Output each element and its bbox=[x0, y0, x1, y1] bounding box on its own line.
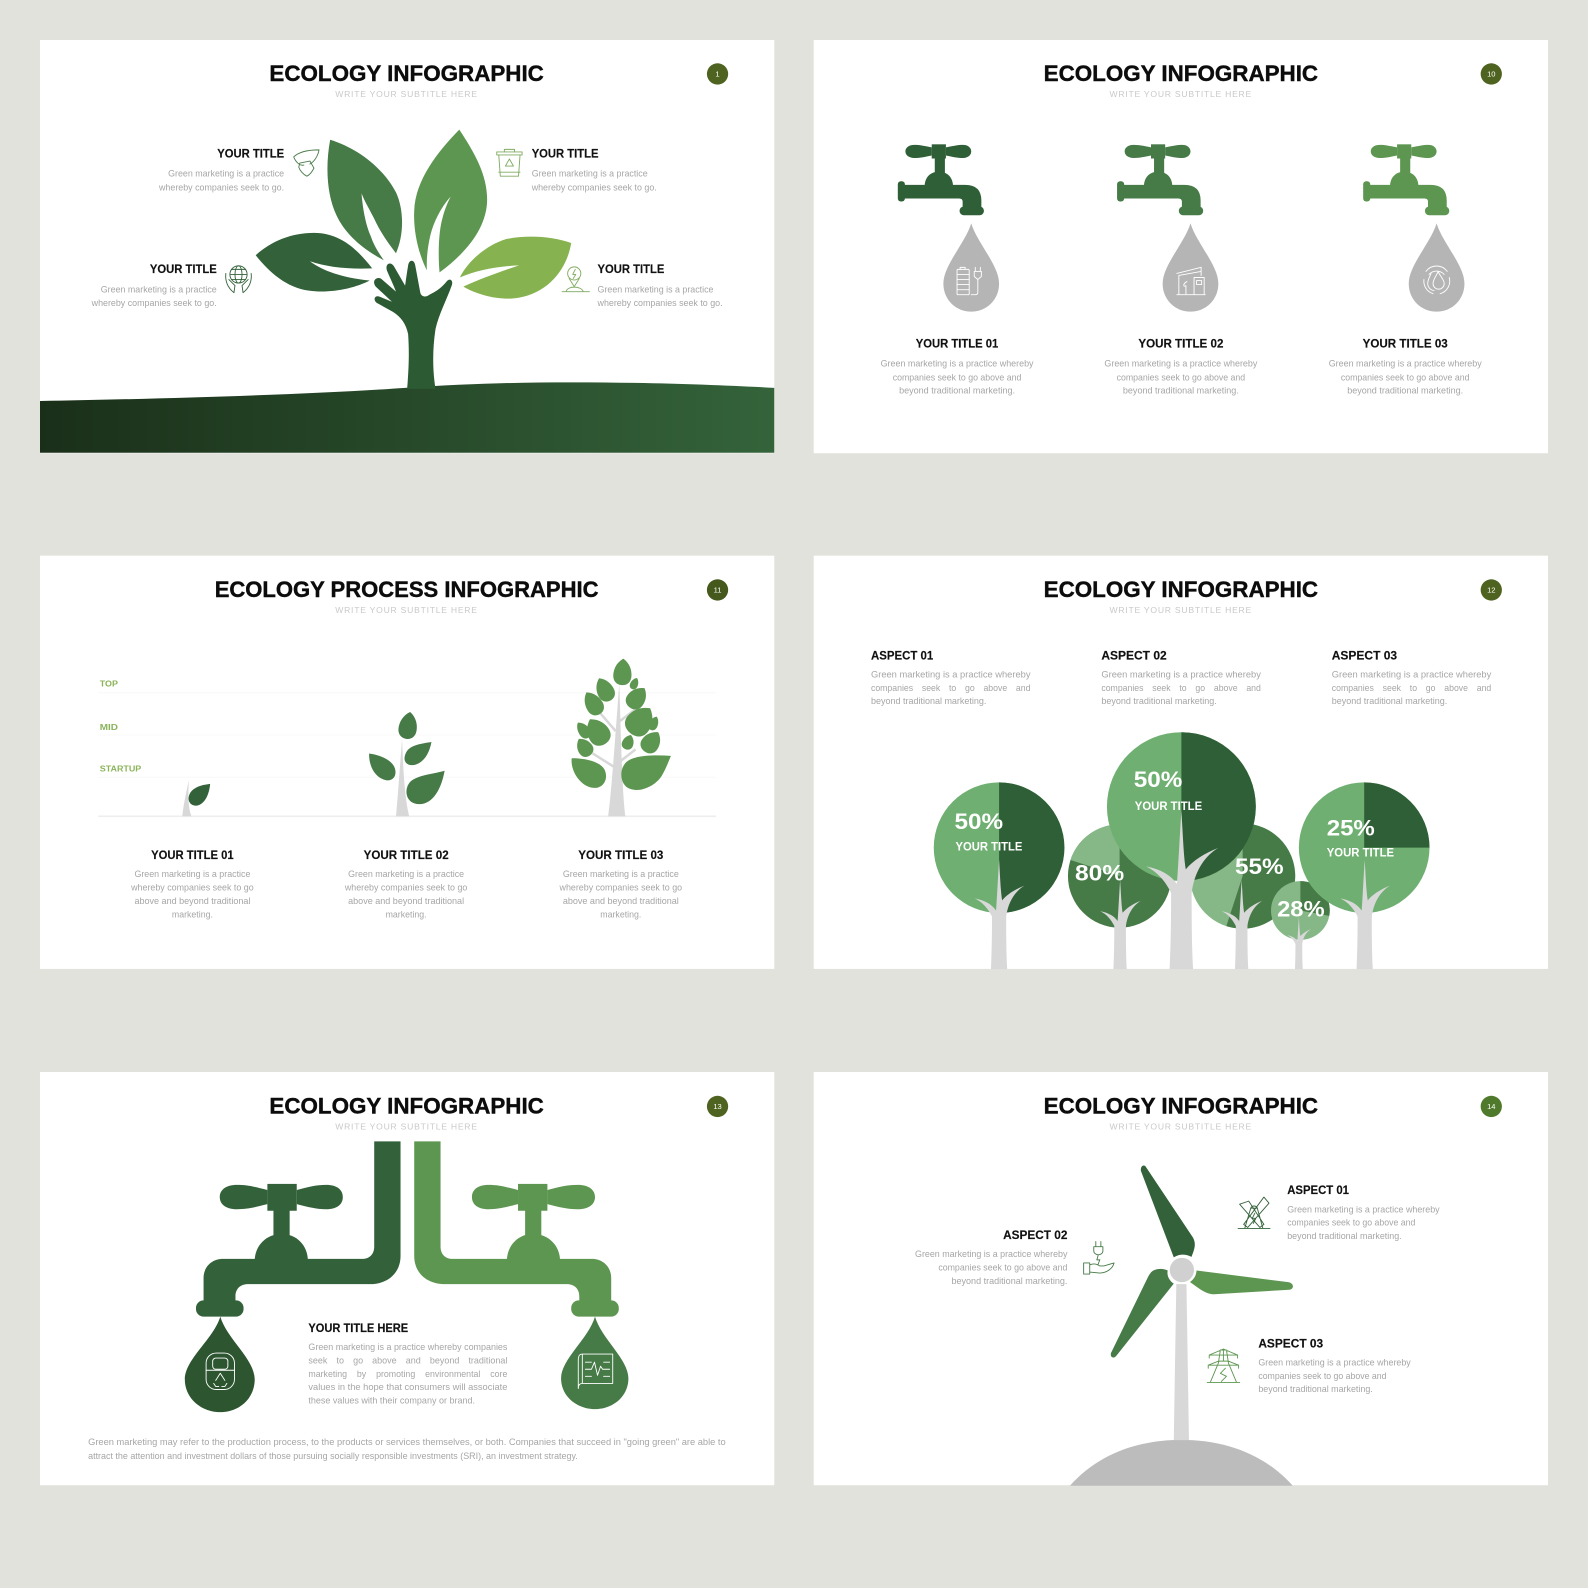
drop 3 bbox=[1409, 223, 1464, 312]
page badge: 1 bbox=[715, 69, 720, 78]
subtitle: WRITE YOUR SUBTITLE HERE bbox=[1109, 605, 1252, 615]
column 1 text: Green marketing is a practice whereby bbox=[881, 359, 1034, 370]
tree: 28%: 28% bbox=[1277, 897, 1325, 922]
callout: lower left bbox=[91, 263, 217, 309]
callout: lower right: YOUR TITLE bbox=[598, 263, 665, 276]
tree: 80%: 80% bbox=[1075, 860, 1124, 885]
column 2 text: beyond traditional marketing. bbox=[1123, 385, 1239, 396]
hand trunk bbox=[374, 261, 452, 389]
tap 2 bbox=[1117, 144, 1203, 215]
tap left bbox=[196, 1141, 401, 1317]
hill bbox=[1070, 1440, 1293, 1486]
tree: right 25%: YOUR TITLE bbox=[1327, 846, 1394, 859]
callout: lower left: YOUR TITLE bbox=[150, 263, 217, 276]
column 2 text: YOUR TITLE 02 bbox=[1138, 337, 1223, 350]
aspect 03 text bbox=[1332, 649, 1491, 707]
panel background bbox=[814, 1072, 1548, 1485]
panel background bbox=[40, 1072, 774, 1485]
subtitle: WRITE YOUR SUBTITLE HERE bbox=[1109, 1122, 1252, 1132]
column 1 text: Green marketing is a practice bbox=[134, 869, 250, 880]
icon: power pylon bbox=[1207, 1349, 1240, 1382]
callout: lower left: whereby companies seek to go. bbox=[91, 298, 217, 309]
sapling stage 1 bbox=[182, 780, 210, 816]
aspect 01 text: beyond traditional marketing. bbox=[871, 696, 986, 707]
column 1 text: above and beyond traditional bbox=[134, 896, 250, 907]
description block: values in the hope that consumers will associate bbox=[308, 1382, 507, 1393]
column 3 text: Green marketing is a practice whereby bbox=[1329, 359, 1482, 370]
page badge: 10 bbox=[1487, 69, 1496, 78]
description block: marketing by promoting environmental core bbox=[308, 1369, 507, 1380]
tree: centre 50%: YOUR TITLE bbox=[1135, 800, 1202, 813]
tap 1 bbox=[898, 144, 984, 215]
leaf: top centre bbox=[414, 130, 487, 272]
column 1 text: YOUR TITLE 01 bbox=[916, 337, 999, 350]
aspect 02 text bbox=[1101, 649, 1261, 707]
stage labels: TOP bbox=[100, 679, 118, 689]
panel: slide 1 hand tree bbox=[40, 40, 774, 453]
page badge bbox=[707, 1096, 728, 1117]
page badge: 11 bbox=[714, 585, 721, 594]
icon: bulb and soil bbox=[562, 267, 589, 292]
aspect 01 text: ASPECT 01 bbox=[1287, 1184, 1349, 1197]
aspect 03 text: companies seek to go above and bbox=[1332, 683, 1491, 694]
column 3 text bbox=[559, 849, 682, 921]
callout: lower left: Green marketing is a practice bbox=[101, 285, 217, 296]
panel: slide 14 wind turbine bbox=[814, 1072, 1548, 1486]
aspect 02 text: ASPECT 02 bbox=[1101, 649, 1167, 662]
column 3 text: above and beyond traditional bbox=[563, 896, 679, 907]
icon: windmill bbox=[1238, 1197, 1270, 1228]
column 1 text: whereby companies seek to go bbox=[130, 883, 254, 894]
column 2 text bbox=[1104, 337, 1258, 396]
aspect 02 text: ASPECT 02 bbox=[1003, 1229, 1067, 1242]
description block: YOUR TITLE HERE bbox=[308, 1322, 408, 1335]
column 2 text: companies seek to go above and bbox=[1117, 372, 1245, 383]
panel background bbox=[40, 40, 774, 453]
drop right bbox=[561, 1317, 628, 1409]
aspect 01 text: companies seek to go above and bbox=[1287, 1217, 1415, 1228]
title: ECOLOGY INFOGRAPHIC bbox=[1044, 61, 1318, 86]
aspect 03 text bbox=[1258, 1337, 1411, 1395]
subtitle: WRITE YOUR SUBTITLE HERE bbox=[335, 1122, 477, 1132]
blade: top bbox=[1141, 1166, 1195, 1257]
leaf: top left bbox=[327, 140, 402, 260]
aspect 01 text: Green marketing is a practice whereby bbox=[871, 669, 1031, 680]
tap right bbox=[414, 1141, 619, 1317]
title: ECOLOGY INFOGRAPHIC bbox=[1044, 577, 1318, 602]
page badge bbox=[707, 579, 728, 601]
column 2 text: Green marketing is a practice bbox=[348, 869, 464, 880]
tree: left 50% bbox=[934, 782, 1064, 969]
tree: 55%: 55% bbox=[1235, 854, 1284, 879]
column 2 text: YOUR TITLE 02 bbox=[364, 849, 449, 862]
title: ECOLOGY PROCESS INFOGRAPHIC bbox=[215, 577, 599, 602]
description block: seek to go above and beyond traditional bbox=[308, 1355, 507, 1366]
column 1 text bbox=[881, 337, 1034, 396]
tree: right 25% bbox=[1299, 782, 1430, 969]
tree: centre 50%: 50% bbox=[1134, 767, 1183, 792]
icon: globe in hands bbox=[226, 266, 251, 293]
aspect 02 text bbox=[915, 1229, 1068, 1287]
icon: energy map bbox=[578, 1354, 613, 1388]
drop 2 bbox=[1163, 223, 1218, 312]
callout: lower right: Green marketing is a practice bbox=[598, 285, 713, 296]
title: ECOLOGY INFOGRAPHIC bbox=[269, 1094, 544, 1119]
stage labels: STARTUP bbox=[100, 764, 142, 774]
title: ECOLOGY INFOGRAPHIC bbox=[1044, 1094, 1318, 1119]
aspect 01 text: beyond traditional marketing. bbox=[1287, 1231, 1402, 1242]
drop 1 bbox=[943, 223, 999, 312]
icon: battery and plug bbox=[957, 267, 981, 295]
callout: top left: Green marketing is a practice bbox=[168, 169, 284, 180]
column 3 text: companies seek to go above and bbox=[1341, 372, 1470, 383]
page badge: 12 bbox=[1487, 585, 1496, 594]
panel background bbox=[40, 556, 774, 969]
description block bbox=[308, 1322, 508, 1406]
aspect 01 text: ASPECT 01 bbox=[871, 649, 934, 662]
tree stage 3 bbox=[572, 658, 671, 816]
stage labels: MID bbox=[100, 722, 118, 732]
aspect 02 text: companies seek to go above and bbox=[1101, 683, 1261, 694]
page badge bbox=[1481, 579, 1502, 601]
callout: lower right: whereby companies seek to go. bbox=[597, 298, 723, 309]
plant stage 2 bbox=[369, 711, 445, 816]
aspect 03 text: beyond traditional marketing. bbox=[1332, 696, 1447, 707]
column 1 text: YOUR TITLE 01 bbox=[151, 849, 234, 862]
panel background bbox=[814, 556, 1548, 969]
page badge bbox=[1481, 63, 1502, 85]
aspect 03 text: ASPECT 03 bbox=[1258, 1337, 1324, 1350]
turbine tower bbox=[1174, 1284, 1189, 1440]
column 3 text: marketing. bbox=[600, 910, 641, 921]
column 3 text: Green marketing is a practice bbox=[563, 869, 679, 880]
footer paragraph bbox=[88, 1437, 726, 1462]
page badge bbox=[707, 63, 728, 85]
aspect 01 text bbox=[1287, 1184, 1440, 1242]
tree: right 25%: 25% bbox=[1327, 816, 1375, 841]
footer paragraph: attract the attention and investment dollars of those pursuing socially responsible investments (SRI), an investment strategy. bbox=[88, 1451, 578, 1462]
subtitle: WRITE YOUR SUBTITLE HERE bbox=[335, 605, 477, 615]
callout: top left: whereby companies seek to go. bbox=[158, 182, 284, 193]
drop left bbox=[185, 1317, 255, 1412]
page badge: 14 bbox=[1487, 1102, 1496, 1111]
icon: charging station bbox=[1177, 267, 1205, 295]
column 3 text bbox=[1329, 337, 1482, 396]
aspect 01 text: companies seek to go above and bbox=[871, 683, 1030, 694]
blade: lower left bbox=[1111, 1269, 1174, 1358]
callout: top right: Green marketing is a practice bbox=[532, 169, 648, 180]
aspect 02 text: Green marketing is a practice whereby bbox=[1101, 669, 1261, 680]
aspect 02 text: beyond traditional marketing. bbox=[951, 1276, 1067, 1287]
icon: water cycle bbox=[1424, 266, 1450, 294]
aspect 03 text: ASPECT 03 bbox=[1332, 649, 1398, 662]
column 3 text: beyond traditional marketing. bbox=[1347, 385, 1463, 396]
column 3 text: whereby companies seek to go bbox=[559, 883, 682, 894]
panel: slide 13 double tap bbox=[40, 1072, 774, 1485]
callout: top right: whereby companies seek to go. bbox=[531, 182, 657, 193]
column 3 text: YOUR TITLE 03 bbox=[1363, 337, 1448, 350]
column 2 text: whereby companies seek to go bbox=[344, 883, 467, 894]
tree: centre 50% bbox=[1107, 732, 1256, 969]
column 2 text: Green marketing is a practice whereby bbox=[1104, 359, 1258, 370]
tree: 55% bbox=[1190, 823, 1295, 969]
tree: left 50%: YOUR TITLE bbox=[956, 841, 1023, 854]
aspect 01 text bbox=[871, 649, 1031, 707]
aspect 01 text: Green marketing is a practice whereby bbox=[1287, 1204, 1440, 1215]
panel: slide 11 growth process bbox=[40, 556, 774, 969]
column 1 text bbox=[130, 849, 254, 921]
tree: 28% bbox=[1271, 881, 1330, 969]
callout: top right bbox=[531, 148, 657, 193]
icon: recycle bin bbox=[497, 149, 522, 176]
column 1 text: marketing. bbox=[172, 910, 213, 921]
callout: top left bbox=[158, 148, 284, 193]
icon: recycling can bbox=[206, 1353, 234, 1390]
icon: plug on hand bbox=[1084, 1242, 1114, 1274]
leaf: right bbox=[460, 237, 571, 299]
callout: top left: YOUR TITLE bbox=[217, 148, 284, 161]
aspect 03 text: companies seek to go above and bbox=[1258, 1371, 1386, 1382]
description block: these values with their company or brand. bbox=[308, 1395, 475, 1406]
column 2 text bbox=[344, 849, 467, 921]
panel: slide 10 taps and drops bbox=[814, 40, 1548, 453]
panel background bbox=[814, 40, 1548, 453]
column 2 text: above and beyond traditional bbox=[348, 896, 464, 907]
column 3 text: YOUR TITLE 03 bbox=[578, 849, 664, 862]
blade: right bbox=[1190, 1271, 1293, 1294]
tree: left 50%: 50% bbox=[955, 809, 1003, 834]
tree: 80% bbox=[1068, 824, 1171, 969]
callout: top right: YOUR TITLE bbox=[532, 148, 599, 161]
column 1 text: beyond traditional marketing. bbox=[899, 385, 1015, 396]
aspect 02 text: companies seek to go above and bbox=[938, 1263, 1067, 1274]
column 2 text: marketing. bbox=[386, 910, 427, 921]
title: ECOLOGY INFOGRAPHIC bbox=[269, 61, 544, 86]
aspect 02 text: Green marketing is a practice whereby bbox=[915, 1249, 1068, 1260]
leaf: left bbox=[256, 233, 372, 292]
aspect 02 text: beyond traditional marketing. bbox=[1101, 696, 1217, 707]
ground hill bbox=[40, 382, 774, 453]
aspect 03 text: beyond traditional marketing. bbox=[1258, 1384, 1373, 1395]
stage labels bbox=[100, 679, 142, 774]
footer paragraph: Green marketing may refer to the production process, to the products or services themselves, or both. Companies that succeed in "going green" are able to bbox=[88, 1437, 726, 1448]
turbine hub bbox=[1170, 1258, 1194, 1282]
column 1 text: companies seek to go above and bbox=[893, 372, 1021, 383]
subtitle: WRITE YOUR SUBTITLE HERE bbox=[1109, 89, 1252, 99]
description block: Green marketing is a practice whereby companies bbox=[308, 1342, 508, 1353]
icon: leaf shield bbox=[294, 150, 319, 176]
callout: lower right bbox=[597, 263, 723, 309]
page badge bbox=[1481, 1096, 1502, 1117]
panel: slide 12 tree percentages bbox=[814, 556, 1548, 969]
page badge: 13 bbox=[713, 1102, 722, 1111]
subtitle: WRITE YOUR SUBTITLE HERE bbox=[335, 89, 477, 99]
aspect 03 text: Green marketing is a practice whereby bbox=[1332, 669, 1491, 680]
aspect 03 text: Green marketing is a practice whereby bbox=[1258, 1357, 1411, 1368]
tap 3 bbox=[1363, 144, 1449, 215]
